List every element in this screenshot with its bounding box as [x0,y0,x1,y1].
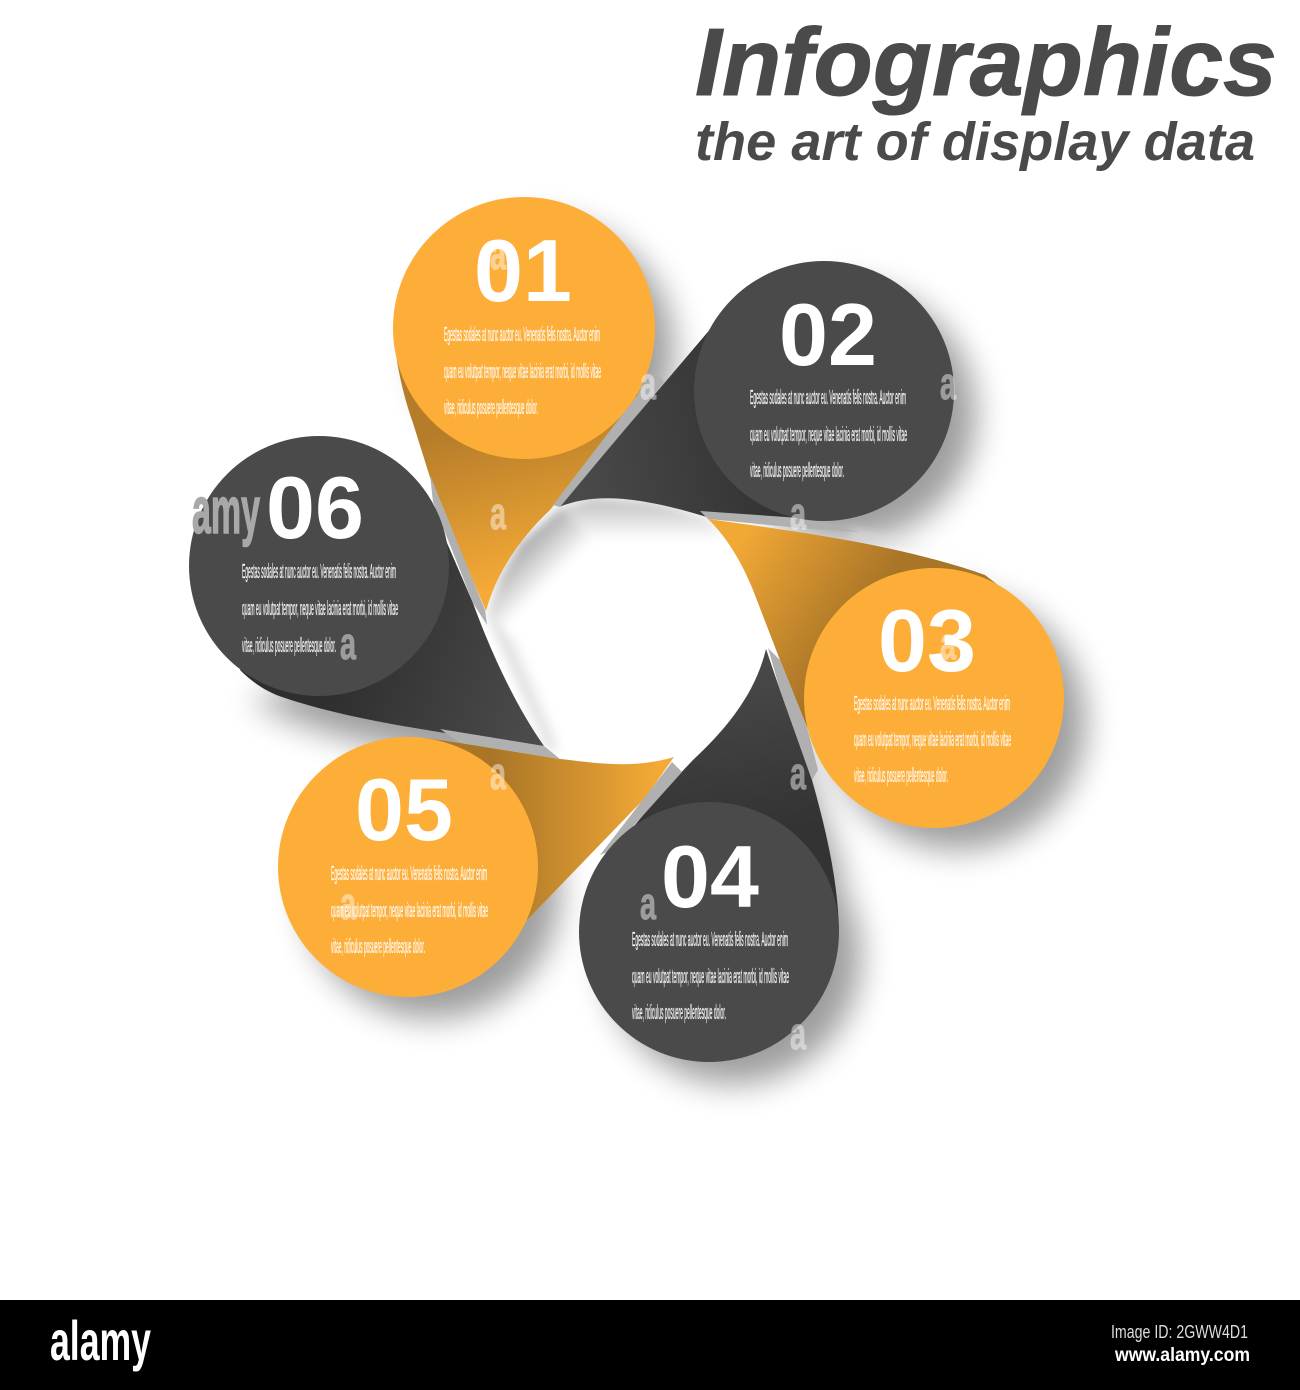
stock watermark letters: a [490,488,507,539]
shadows inside central opening [487,497,990,750]
tail 02 [559,300,820,520]
stock watermark letters: a [940,618,957,669]
stock watermark letters: a [340,618,357,669]
panel 02: vitae, ridiculus posuere pellentesque dolor. [750,460,844,482]
stock watermark letters: a [490,748,507,799]
tail 05 [400,738,674,920]
gray edge stripes [430,372,860,855]
panel 05: 05 [355,760,453,859]
panel 05: vitae, ridiculus posuere pellentesque dolor. [331,936,425,958]
footer bar: Image ID: 2GWW4D1 [1111,1322,1248,1342]
panel 02: 02 [779,285,877,384]
stock watermark letters: a [790,1008,807,1059]
stock watermark letters: a [490,228,507,279]
tail 01 [394,335,640,611]
panel 03: vitae, ridiculus posuere pellentesque dolor. [854,765,948,787]
footer bar [0,1300,1300,1390]
panel 06: vitae, ridiculus posuere pellentesque dolor. [242,635,336,657]
footer bar: www.alamy.com [1114,1345,1250,1366]
panel 01 [393,197,655,459]
text: Egestas sodales at nunc auctor eu. Venenatis felis nostra. Auctor enim [444,324,600,346]
panel 06: 06 [266,458,364,557]
text: quam eu volutpat tempor, neque vitae lacinia erat morbi, id mollis vitae [242,598,398,620]
soft drop shadows [250,222,1086,1084]
stock watermark letters: a [790,488,807,539]
panel 03 [804,568,1064,828]
title: Infographics [695,9,1277,116]
panel 03: 03 [878,591,976,690]
subtitle: the art of display data [695,112,1255,172]
stock watermark letters: a [640,358,657,409]
stock watermark letters: a [640,878,657,929]
text: Egestas sodales at nunc auctor eu. Venenatis felis nostra. Auctor enim [242,561,396,583]
panel 06 [189,436,449,696]
tail 04 [600,649,839,960]
text: Egestas sodales at nunc auctor eu. Venenatis felis nostra. Auctor enim [632,929,788,951]
stock watermark letters: a [340,878,357,929]
stock watermark letters: amy [192,473,260,547]
footer bar: alamy [50,1309,151,1372]
panel 04: 04 [661,827,759,926]
stock watermark letters: a [790,748,807,799]
text: quam eu volutpat tempor, neque vitae lacinia erat morbi, id mollis vitae [444,361,601,383]
panel 02 [694,261,954,521]
text: quam eu volutpat tempor, neque vitae lacinia erat morbi, id mollis vitae [331,900,488,922]
text: quam eu volutpat tempor, neque vitae lacinia erat morbi, id mollis vitae [632,966,789,988]
tail 03 [708,519,1030,745]
stock watermark letters: a [940,358,957,409]
panel 04 [579,802,839,1062]
tail 06 [240,492,544,746]
panel 01: 01 [474,221,572,320]
text: Egestas sodales at nunc auctor eu. Venenatis felis nostra. Auctor enim [331,863,487,885]
panel 04: vitae, ridiculus posuere pellentesque dolor. [632,1002,726,1024]
panel 05 [278,737,538,997]
stock watermark letters [192,228,957,1059]
panel 01: vitae, ridiculus posuere pellentesque dolor. [444,397,538,419]
